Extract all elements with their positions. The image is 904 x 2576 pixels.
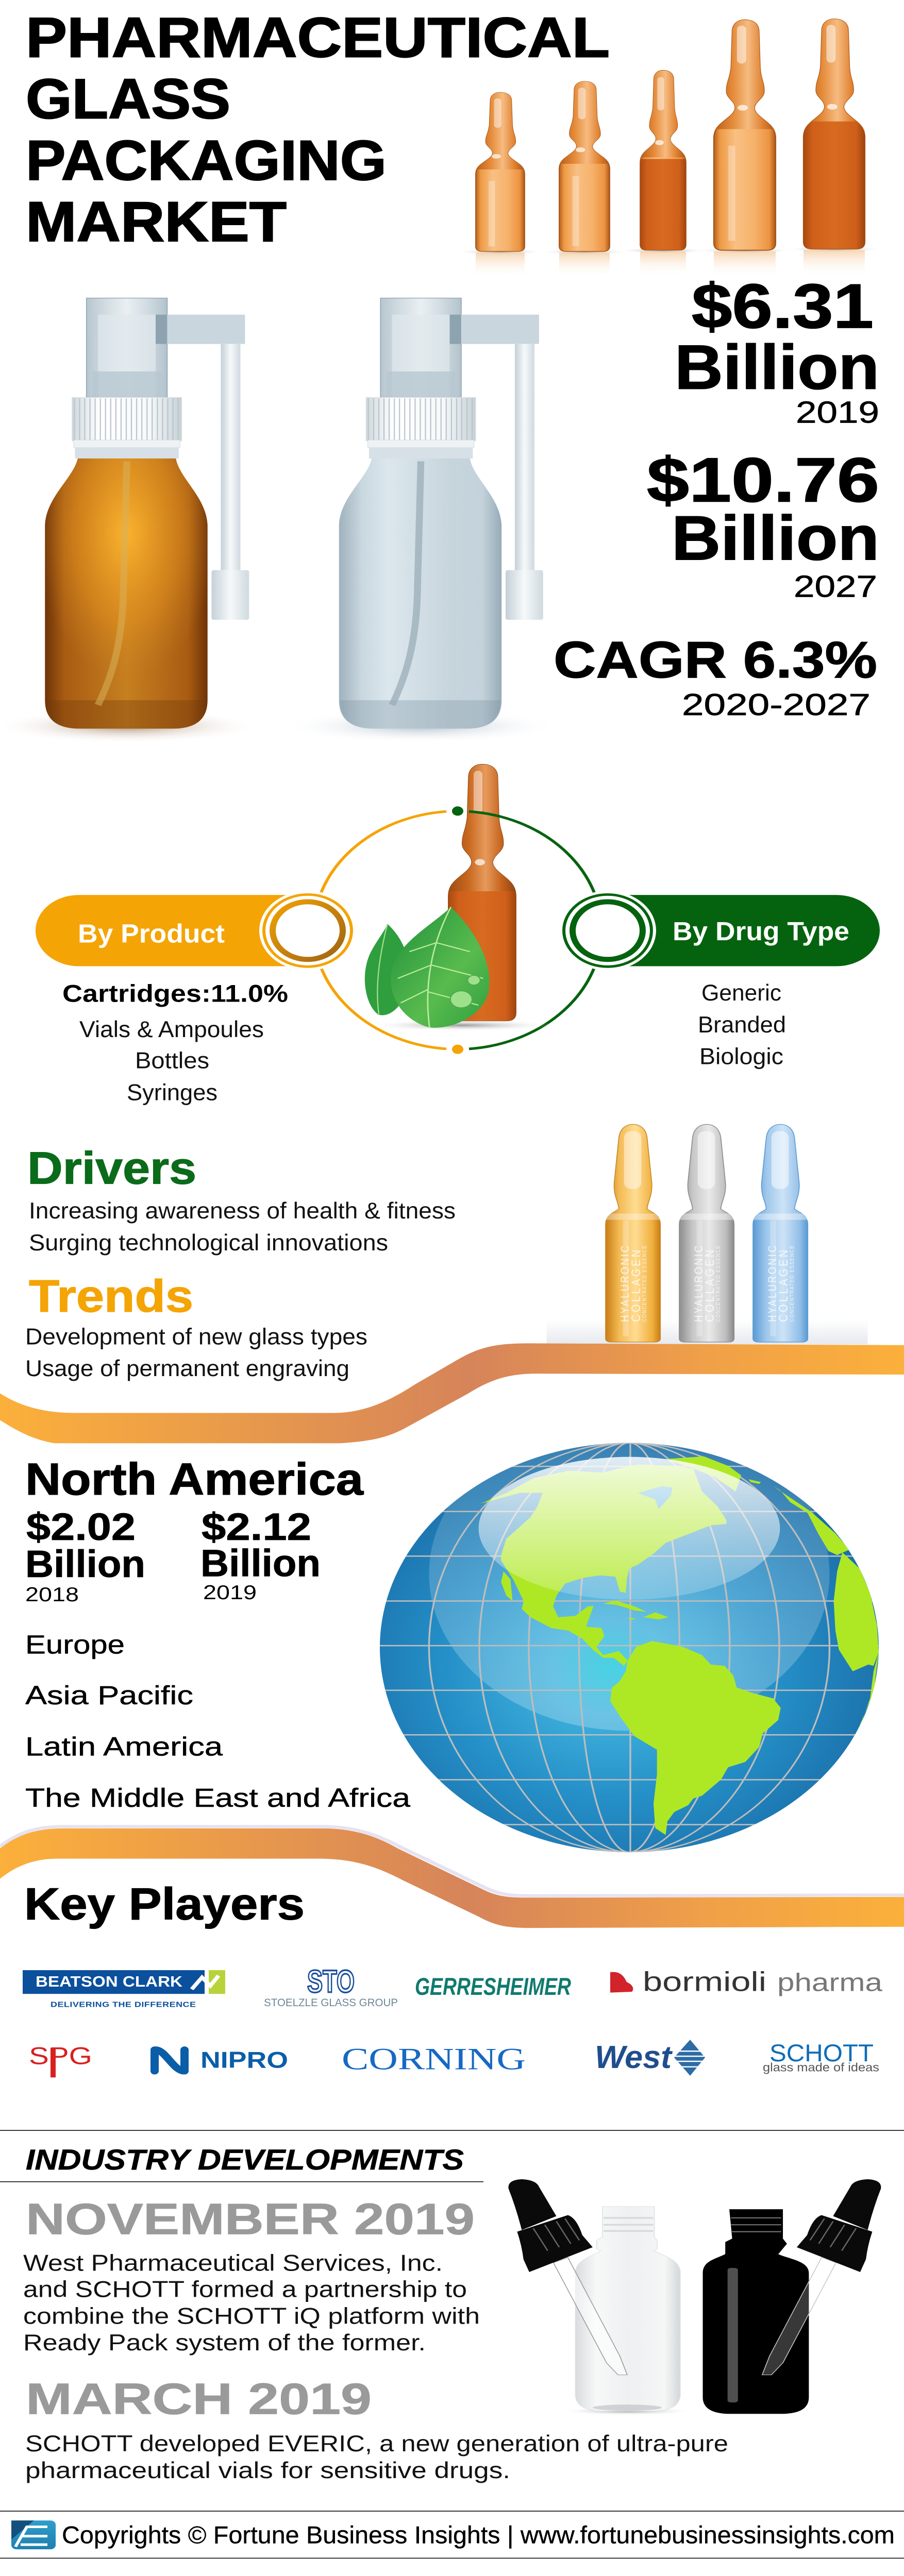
three essence ampoules: [606, 1124, 808, 1342]
icon: globe: [379, 1443, 879, 1853]
by drug type list: Biologic: [699, 1044, 783, 1069]
by product list: Syringes: [127, 1080, 217, 1105]
market size 2027: Billion: [672, 503, 879, 573]
title: GLASS: [26, 67, 230, 130]
heading: key players: Key Players: [24, 1878, 305, 1929]
heading: drivers: Drivers: [27, 1143, 196, 1193]
text: november development: West Pharmaceutical Services, Inc.: [23, 2250, 443, 2276]
title: [26, 6, 610, 253]
market size 2019: Billion: [675, 332, 879, 402]
trends list: Development of new glass types: [25, 1324, 367, 1349]
logo: corning: CORNING: [342, 2042, 526, 2076]
three essence ampoules: CONCENTRATED ESSENCE: [715, 1245, 722, 1322]
panel: by product pill: By Product: [78, 919, 225, 948]
panel: by drug type pill: By Drug Type: [673, 917, 849, 946]
dropper bottles illustration: [508, 2179, 881, 2415]
by product list: Bottles: [135, 1048, 209, 1074]
icon: central ampoule: [448, 765, 516, 1021]
text: march development: [25, 2431, 728, 2483]
north america 2018 value: $2.02: [26, 1505, 136, 1548]
three essence ampoules: CONCENTRATED ESSENCE: [642, 1245, 648, 1322]
by drug type list: Generic: [701, 980, 781, 1006]
text: november development: Ready Pack system of the former.: [23, 2330, 426, 2355]
by drug type list: Branded: [698, 1012, 786, 1038]
text: november development: [23, 2250, 480, 2355]
drivers list: Increasing awareness of health & fitness: [29, 1198, 456, 1224]
regions list: The Middle East and Africa: [25, 1784, 410, 1813]
north america 2018 value: Billion: [25, 1543, 145, 1585]
logo: spg: SPG: [29, 2043, 92, 2070]
three essence ampoules: HYALURONIC: [766, 1246, 779, 1322]
text: november development: combine the SCHOTT iQ platform with: [23, 2303, 480, 2329]
logo: bormioli pharma: bormioli: [643, 1967, 766, 1997]
logo: schott: SCHOTT: [769, 2040, 874, 2067]
ampoule row illustration: [456, 19, 883, 278]
logo: nipro: NIPRO: [200, 2047, 288, 2073]
logo: stoelzle: STOELZLE GLASS GROUP: [264, 1996, 398, 2009]
trends list: Usage of permanent engraving: [25, 1356, 349, 1381]
swoosh band 2: [0, 1826, 904, 1928]
text: march development: pharmaceutical vials for sensitive drugs.: [25, 2458, 510, 2483]
footer logo: [11, 2520, 56, 2549]
title: PACKAGING: [26, 129, 387, 192]
CAGR: [554, 631, 877, 722]
text: march development: SCHOTT developed EVERIC, a new generation of ultra-pure: [25, 2431, 728, 2456]
heading: industry developments: INDUSTRY DEVELOPMENTS: [26, 2144, 464, 2176]
by drug type list: [698, 980, 786, 1069]
logo: bormioli pharma: [610, 1967, 882, 1997]
clear spray bottle: [282, 298, 559, 743]
market size 2019: $6.31: [692, 271, 874, 341]
CAGR: CAGR 6.3%: [554, 631, 877, 689]
logo: schott: [763, 2040, 879, 2074]
three essence ampoules: COLLAGEN: [776, 1250, 790, 1322]
icon: leaves: [365, 907, 556, 1031]
segment ring: [314, 806, 601, 1054]
logo: beatson clark: DELIVERING THE DIFFERENCE: [51, 2001, 196, 2009]
trends list: [25, 1324, 367, 1381]
date: march 2019: MARCH 2019: [26, 2375, 372, 2424]
heading: trends: Trends: [29, 1270, 193, 1321]
logo: gerresheimer: GERRESHEIMER: [415, 1973, 571, 2001]
swoosh band 1: [0, 1319, 904, 1443]
logo: bormioli pharma: pharma: [777, 1968, 882, 1996]
by product list: [62, 980, 288, 1105]
logo: beatson clark: [23, 1970, 225, 2009]
text: november development: and SCHOTT formed a partnership to: [23, 2277, 467, 2302]
heading: north america: North America: [25, 1454, 364, 1504]
north america 2019 value: Billion: [200, 1542, 321, 1585]
panel: by product pill: [36, 891, 356, 971]
regions list: [25, 1630, 410, 1813]
market size 2019: 2019: [796, 395, 879, 429]
drivers list: Surging technological innovations: [29, 1230, 388, 1256]
by product list: Cartridges:11.0%: [62, 980, 288, 1007]
three essence ampoules: COLLAGEN: [629, 1250, 643, 1322]
market size 2019: [675, 271, 879, 429]
title: PHARMACEUTICAL: [26, 6, 610, 69]
north america 2018 value: 2018: [25, 1584, 79, 1606]
regions list: Latin America: [25, 1733, 223, 1761]
market size 2027: 2027: [794, 569, 877, 603]
logo: beatson clark: BEATSON CLARK: [36, 1973, 182, 1990]
market size 2027: [647, 445, 879, 603]
logo: schott: glass made of ideas: [763, 2061, 879, 2074]
three essence ampoules: HYALURONIC: [619, 1246, 631, 1322]
three essence ampoules: COLLAGEN: [702, 1250, 716, 1322]
logo: stoelzle: STO: [307, 1964, 355, 1999]
market size 2027: $10.76: [647, 445, 879, 515]
title: MARKET: [26, 190, 287, 253]
north america 2019 value: 2019: [203, 1582, 257, 1604]
north america 2019 value: [200, 1505, 321, 1604]
CAGR: 2020-2027: [682, 687, 870, 722]
drivers list: [29, 1198, 456, 1256]
date: november 2019: NOVEMBER 2019: [26, 2195, 475, 2244]
regions list: Europe: [25, 1630, 125, 1659]
north america 2019 value: $2.12: [202, 1505, 311, 1548]
amber spray bottle: [0, 298, 259, 743]
three essence ampoules: CONCENTRATED ESSENCE: [789, 1245, 795, 1322]
logo: west: West: [595, 2039, 673, 2075]
panel: by drug type pill: [559, 891, 880, 971]
logo: stoelzle: [264, 1964, 398, 2009]
by product list: Vials & Ampoules: [79, 1016, 264, 1042]
three essence ampoules: HYALURONIC: [693, 1246, 705, 1322]
north america 2018 value: [25, 1505, 145, 1606]
logo: nipro: [155, 2047, 288, 2073]
regions list: Asia Pacific: [25, 1681, 193, 1710]
